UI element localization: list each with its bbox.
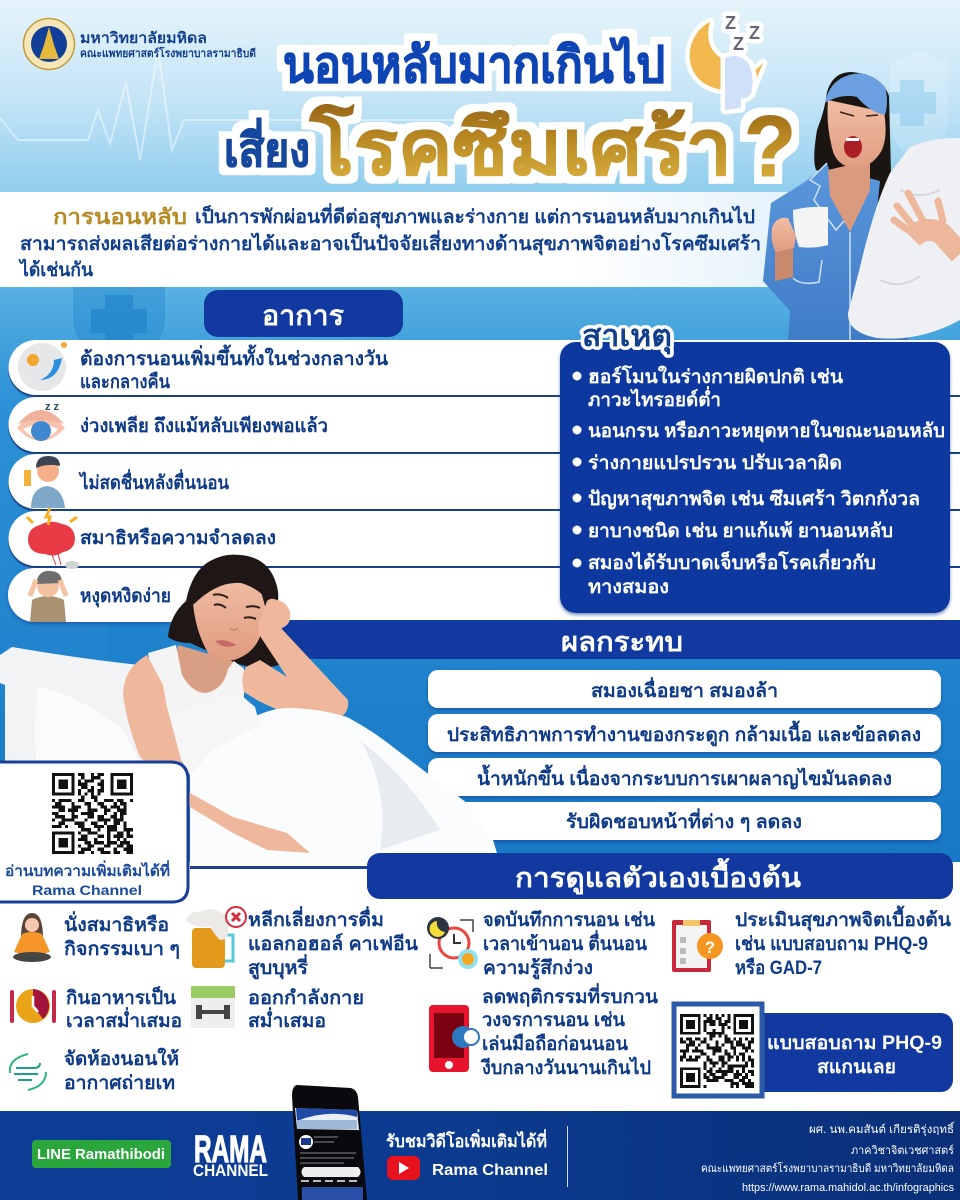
hair front [193, 570, 271, 605]
item: ventilated room: จัดห้องนอนให้ [64, 1047, 179, 1070]
item: reduce disturbing behaviour: เล่นมือถือก่อนนอน [482, 1033, 628, 1055]
icon: calendar dumbbell [191, 986, 235, 1028]
video call to action: รับชมวิดีโอเพิ่มเติมได้ที่ [386, 1129, 547, 1151]
icon: clock with cutlery [10, 989, 56, 1023]
icon: sleeping moon with z letters: Z [749, 23, 760, 43]
icon: brain [27, 508, 77, 565]
icon: YouTube play [387, 1156, 420, 1180]
mug [793, 207, 828, 248]
icon: clipboard question [672, 920, 723, 972]
item: meal times [10, 985, 182, 1032]
university logo and name: มหาวิทยาลัยมหิดล [80, 29, 207, 47]
panel: PHQ-9 QR button [674, 1004, 953, 1096]
LINE badge [32, 1140, 171, 1168]
panel: QR article link [0, 762, 188, 902]
icon: sleepy eye: z z [45, 401, 60, 413]
effect 4 [428, 802, 941, 840]
item: avoid alcohol: สูบบุหรี่ [248, 954, 309, 980]
icon: air flow [10, 1054, 46, 1090]
pajama collar and piping [793, 163, 866, 340]
intro text: เป็นการพักผ่อนที่ดีต่อสุขภาพและร่างกาย แต่การนอนหลับมากเกินไป [195, 203, 755, 229]
heading: self care [367, 853, 953, 899]
panel: causes [560, 320, 950, 613]
background: blue mid section [0, 287, 960, 862]
chest and neck [170, 645, 244, 698]
duvet shaded fold [360, 740, 440, 850]
cause list: ยาบางชนิด เช่น ยาแก้แพ้ ยานอนหลับ [588, 520, 893, 542]
face [828, 100, 886, 168]
item: reduce disturbing behaviour: งีบกลางวันนานเกินไป [480, 1056, 651, 1079]
fist [258, 599, 290, 636]
item: reduce disturbing behaviour: ลดพฤติกรรมที่รบกวน [482, 983, 658, 1008]
mouth [215, 640, 236, 647]
heading: effects band [255, 620, 960, 659]
icon: beer with cross [186, 907, 246, 968]
yawning mouth [844, 136, 862, 158]
background: heartbeat line and shields [0, 50, 948, 160]
closed eyes [840, 112, 878, 116]
cause list [588, 365, 945, 598]
intro text: สามารถส่งผลเสียต่อร่างกายได้และอาจเป็นปัจจัยเสี่ยงทางด้านสุขภาพจิตอย่างโรคซึมเศร้า [20, 230, 761, 256]
item: mental health assessment: หรือ GAD-7 [735, 957, 822, 979]
credits [701, 1121, 956, 1194]
photo: tired woman in bed [0, 555, 500, 869]
item: exercise [191, 986, 364, 1032]
item: reduce disturbing behaviour [429, 983, 658, 1079]
intro text: ได้เช่นกัน [18, 258, 93, 281]
bed bottom shadow line [190, 866, 370, 869]
item: meditation: นั่งสมาธิหรือ [64, 911, 169, 936]
row: concentration: สมาธิหรือความจำลดลง [80, 527, 276, 549]
neck and chest [828, 160, 870, 232]
icon: tired man [24, 456, 65, 508]
row: sleep more: และกลางคืน [80, 371, 170, 393]
row: irritable: หงุดหงิดง่าย [80, 586, 171, 608]
cause list: สมองได้รับบาดเจ็บหรือโรคเกี่ยวกับ [588, 549, 876, 574]
icon: sleeping moon with z letters: Z [733, 34, 744, 54]
title: ? [744, 99, 796, 195]
title: โรคซึมเศร้า [309, 103, 732, 191]
title [224, 36, 796, 195]
credits: ภาควิชาจิตเวชศาสตร์ [851, 1144, 954, 1157]
icon: meditating woman [13, 913, 51, 962]
item: mental health assessment [672, 905, 951, 979]
video call to action [386, 1129, 548, 1180]
effect 1 [428, 670, 941, 708]
intro band [0, 192, 960, 287]
row: not refreshed: ไม่สดชื่นหลังตื่นนอน [78, 469, 229, 494]
hand on pillow [894, 193, 960, 254]
effect 2: ประสิทธิภาพการทำงานของกระดูก กล้ามเนื้อ และข้อลดลง [447, 720, 921, 747]
hair [168, 555, 279, 668]
forearm left [775, 243, 793, 281]
intro text: การนอนหลับ [53, 206, 187, 229]
icon: sleeping moon with z letters [690, 13, 763, 110]
footer [0, 1085, 960, 1200]
item: ventilated room: อากาศถ่ายเท [64, 1073, 175, 1094]
heading: symptoms [204, 290, 403, 337]
duvet [190, 708, 500, 863]
background: medical shield motif [73, 287, 170, 660]
heading: causes: สาเหตุ [582, 320, 672, 355]
effect 3: น้ำหนักขึ้น เนื่องจากระบบการเผาผลาญไขมันลดลง [477, 764, 892, 790]
item: ventilated room [10, 1047, 179, 1094]
panel: PHQ-9 QR button: แบบสอบถาม PHQ-9 [767, 1033, 942, 1054]
rear pillow [0, 647, 160, 765]
row: drowsy: ง่วงเพลีย ถึงแม้หลับเพียงพอแล้ว [80, 415, 328, 437]
row: irritable [8, 561, 960, 622]
item: meal times: เวลาสม่ำเสมอ [66, 1007, 182, 1032]
panel: PHQ-9 QR button: สแกนเลย [817, 1057, 896, 1078]
cause list: ปัญหาสุขภาพจิต เช่น ซึมเศร้า วิตกกังวล [588, 488, 920, 511]
credits: https://www.rama.mahidol.ac.th/infographics [742, 1182, 954, 1194]
row: sleep more [8, 340, 960, 395]
icon: clipboard question: ? [705, 938, 715, 957]
hair [814, 72, 891, 274]
propping arm [242, 627, 348, 720]
eyes and brows [213, 594, 260, 619]
item: avoid alcohol: แอลกอฮอล์ คาเฟอีน [248, 933, 418, 955]
row: drowsy [8, 397, 960, 452]
item: avoid alcohol [186, 906, 418, 980]
item: meditation [13, 911, 180, 962]
icon: clock moon sun [427, 917, 478, 969]
heading: effects band: ผลกระทบ [561, 627, 683, 657]
item: mental health assessment: ประเมินสุขภาพจิตเบื้องต้น [735, 905, 951, 932]
icon: sleeping moon with z letters: Z [725, 13, 736, 33]
care items [10, 905, 951, 1094]
white tank top [148, 645, 244, 730]
icon: phone with chat [429, 1005, 479, 1072]
row: concentration [8, 508, 960, 566]
sleep mask [825, 74, 887, 115]
row: sleep more: ต้องการนอนเพิ่มขึ้นทั้งในช่วงกลางวัน [80, 344, 388, 370]
QR code [680, 1014, 754, 1088]
item: meditation: กิจกรรมเบา ๆ [64, 939, 180, 960]
photo: yawning woman with pillow and mug [763, 72, 960, 341]
cause list: ร่างกายแปรปรวน ปรับเวลาผิด [588, 453, 842, 474]
cause list: ภาวะไทรอยด์ต่ำ [588, 386, 721, 411]
item: sleep diary: ความรู้สึกง่วง [483, 957, 593, 980]
panel: QR article link: Rama Channel [32, 882, 142, 898]
hand holding mug [772, 218, 796, 252]
pillow [848, 138, 960, 339]
heading: self care: การดูแลตัวเองเบื้องต้น [515, 857, 802, 895]
face [193, 577, 268, 660]
university logo and name: คณะแพทยศาสตร์โรงพยาบาลรามาธิบดี [80, 46, 256, 60]
background: header gradient [0, 0, 960, 192]
RAMA Channel logo: RAMA [194, 1129, 267, 1171]
cause list: ทางสมอง [588, 577, 669, 598]
effect 3 [428, 758, 941, 796]
item: meal times: กินอาหารเป็น [66, 985, 176, 1009]
effect 4: รับผิดชอบหน้าที่ต่าง ๆ ลดลง [566, 808, 802, 833]
front pillow [35, 686, 142, 768]
video call to action: Rama Channel [432, 1162, 548, 1179]
QR code [52, 773, 133, 854]
LINE badge: LINE Ramathibodi [37, 1146, 165, 1163]
RAMA Channel logo [193, 1129, 268, 1180]
item: sleep diary: เวลาเข้านอน ตื่นนอน [483, 930, 647, 955]
effect 2 [428, 714, 941, 752]
icon: day and night [18, 342, 67, 391]
item: reduce disturbing behaviour: วงจรการนอน เช่น [482, 1010, 625, 1031]
item: sleep diary: จดบันทึกการนอน เช่น [483, 909, 655, 931]
icon: university seal [24, 18, 74, 70]
panel: symptom rows [8, 340, 960, 622]
item: exercise: สม่ำเสมอ [248, 1007, 326, 1032]
title: เสี่ยง [224, 118, 310, 176]
cause list: ฮอร์โมนในร่างกายผิดปกติ เช่น [588, 365, 843, 388]
effect 1: สมองเฉื่อยชา สมองล้า [591, 677, 778, 702]
intro text [18, 203, 761, 281]
row: not refreshed [8, 454, 960, 509]
heading: symptoms: อาการ [262, 300, 344, 331]
front duvet fold [163, 690, 260, 775]
panel: effects pills [428, 670, 941, 840]
item: exercise: ออกกำลังกาย [248, 988, 364, 1009]
item: mental health assessment: เช่น แบบสอบถาม PHQ-9 [735, 934, 928, 955]
nose [230, 628, 238, 630]
cause list: นอนกรน หรือภาวะหยุดหายในขณะนอนหลับ [588, 419, 945, 443]
white section background [0, 869, 960, 1112]
item: sleep diary [427, 909, 655, 980]
icon: sleepy eye [17, 401, 65, 441]
credits: ผศ. นพ.คมสันต์ เกียรติรุ่งฤทธิ์ [809, 1121, 956, 1136]
item: avoid alcohol: หลีกเลี่ยงการดื่ม [248, 906, 384, 931]
title: นอนหลับมากเกินไป [283, 36, 665, 93]
pajama body [763, 163, 910, 341]
icon: stressed man [30, 561, 79, 622]
university logo and name [24, 18, 256, 70]
left arm [123, 655, 310, 853]
panel: QR article link: อ่านบทความเพิ่มเติมได้ที่ [5, 860, 170, 880]
cause bullets [572, 372, 582, 568]
RAMA Channel logo: CHANNEL [193, 1161, 268, 1180]
icon: phone mockup [292, 1085, 367, 1200]
